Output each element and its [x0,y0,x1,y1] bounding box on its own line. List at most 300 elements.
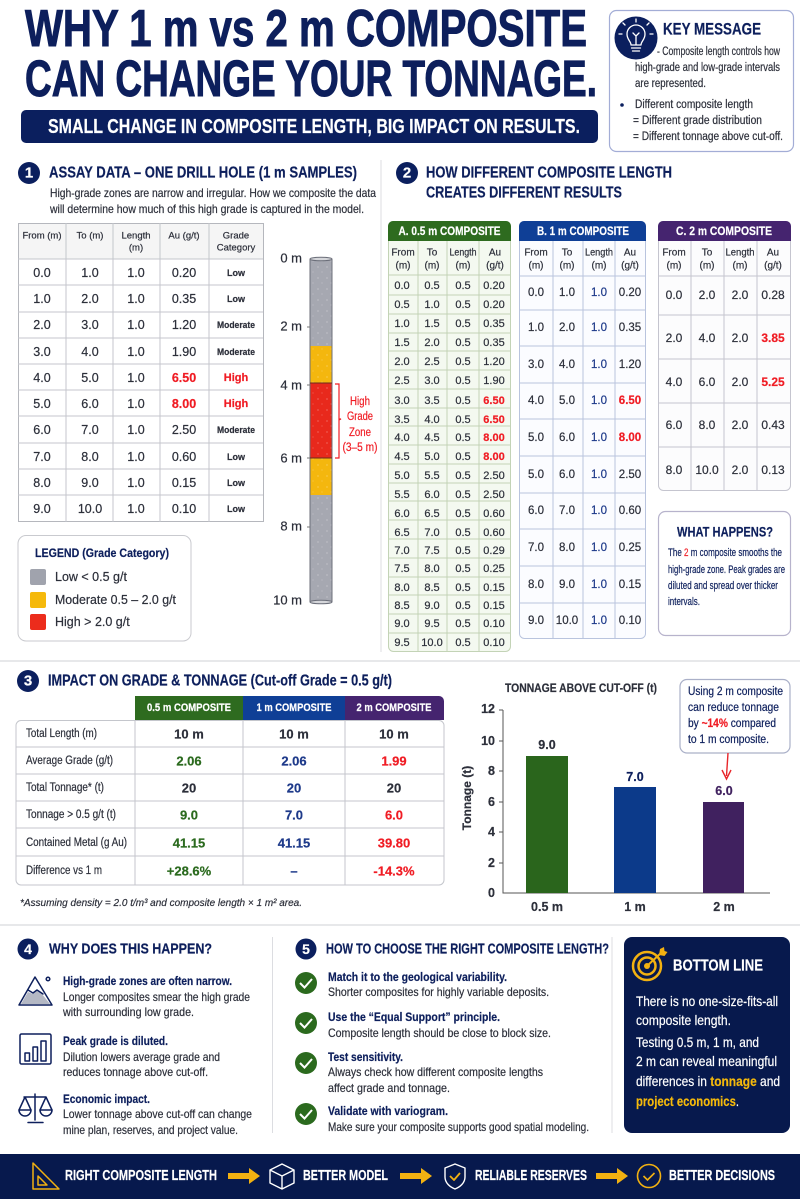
table A: 0.5 m composite: 4.5 [424,432,440,444]
tip: validate with variogram [328,1104,589,1134]
section 4 heading: WHY DOES THIS HAPPEN? [49,940,212,958]
table C: 2 m composite: 0.43 [761,418,785,432]
table C: 2 m composite: 4.0 [699,331,716,345]
table A: 0.5 m composite: 0.60 [483,527,505,539]
bar chart: tonnage above cut-off: 6 [488,795,495,809]
table A: 0.5 m composite: 0.5 [455,527,471,539]
assay data table: 7.0 [81,423,99,437]
section 1 intro text [49,186,376,216]
table C: 2 m composite: 2.0 [732,331,749,345]
table A: 0.5 m composite: 1.20 [483,356,505,368]
footer flow banner [0,1154,800,1199]
table A: 0.5 m composite: 1.0 [394,318,410,330]
table A: 0.5 m composite: 0.5 [455,451,471,463]
impact comparison table: 0.5 m COMPOSITE [147,702,231,714]
assay data table: Low [227,268,246,278]
bar chart: tonnage above cut-off: 10 [481,734,495,748]
bar chart: tonnage above cut-off: 8 [488,764,495,778]
callout: tonnage reduction [680,680,790,779]
table A: 0.5 m composite: 7.5 [424,545,440,557]
section 1 heading: ASSAY DATA – ONE DRILL HOLE (1 m SAMPLES) [49,164,357,182]
assay data table: 1.0 [81,266,99,280]
table C: 2 m composite: Au [767,248,779,258]
impact comparison table: Total Tonnage* (t) [26,782,104,794]
impact comparison table: 10 m [174,726,204,742]
table B: 1 m composite: To [562,248,573,258]
impact comparison table: Tonnage > 0.5 g/t (t) [26,809,116,821]
footnote: *Assuming density = 2.0 t/m³ and composite length × 1 m² area. [20,897,302,909]
table B: 1 m composite: 6.0 [559,432,575,444]
table B: 1 m composite: 0.60 [619,505,641,517]
table A: 0.5 m composite: 0.5 [455,356,471,368]
table A: 0.5 m composite: 0.5 [455,470,471,482]
table C: 2 m composite: 2.0 [732,375,749,389]
reason: economic impact: Lower tonnage above cut-off can change [63,1107,252,1121]
table A: 0.5 m composite: (m) [396,260,410,272]
table A: 0.5 m composite: 2.0 [394,356,410,368]
assay data table: Category [217,242,256,254]
bar chart: tonnage above cut-off [460,681,770,914]
table A: 0.5 m composite: 0.35 [483,337,505,349]
table A: 0.5 m composite: 1.0 [424,299,440,311]
table B: 1 m composite: From [524,248,548,258]
title [25,0,597,107]
bar chart: tonnage above cut-off: TONNAGE ABOVE CUT-OFF (t) [505,681,657,695]
footer flow banner: RELIABLE RESERVES [475,1168,587,1184]
section 2 heading: CREATES DIFFERENT RESULTS [426,184,622,202]
table B: 1 m composite: 0.25 [619,542,641,554]
drill core column: 0 m [280,250,302,266]
panel: bottom line: differences in tonnage and [636,1073,780,1089]
table B: 1 m composite: 8.0 [528,579,544,591]
assay data table: 8.00 [172,397,196,411]
assay data table: Moderate [217,320,255,330]
assay data table: 1.0 [127,476,145,490]
table B: 1 m composite: B. 1 m COMPOSITE [537,224,629,238]
table A: 0.5 m composite: 2.5 [394,375,410,387]
panel: key message: Different composite length [635,99,753,111]
table A: 0.5 m composite: 0.25 [483,563,505,575]
impact comparison table: – [290,864,298,878]
bar chart: tonnage above cut-off: Tonnage (t) [460,766,474,830]
section 1 intro text: High-grade zones are narrow and irregular. How we composite the data [50,186,376,200]
table B: 1 m composite: 1.20 [619,359,641,371]
reason: peak grade diluted: reduces tonnage above cut-off. [63,1065,208,1079]
assay data table: 0.0 [33,266,51,280]
table A: 0.5 m composite: 8.5 [394,600,410,612]
assay data table: 1.0 [127,292,145,306]
table C: 2 m composite: To [702,248,713,258]
table A: 0.5 m composite: 8.00 [483,451,505,463]
table A: 0.5 m composite: 6.50 [483,395,505,407]
icon: check 1 [295,972,317,994]
table B: 1 m composite: Au [624,248,636,258]
icon: check 3 [295,1052,317,1074]
table B: 1 m composite: (m) [528,260,544,272]
title: CAN CHANGE YOUR TONNAGE. [25,50,597,107]
assay data table: 0.20 [172,266,196,280]
assay data table: High [224,372,248,384]
table A: 0.5 m composite: 0.5 [455,432,471,444]
assay data table: 6.0 [81,397,99,411]
section 1 heading: 1 [25,164,33,182]
table B: 1 m composite: 0.10 [619,615,641,627]
table B: 1 m composite: 8.00 [619,432,641,444]
tip: equal support: Composite length should be close to block size. [328,1026,551,1040]
assay data table: 1.0 [127,266,145,280]
assay data table: 1.90 [172,345,196,359]
reason: narrow zones [62,974,250,1019]
panel: bottom line: project economics. [636,1093,739,1109]
table A: 0.5 m composite: 3.0 [394,395,410,407]
assay data table: 2.50 [172,423,196,437]
tip: validate with variogram: Validate with variogram. [328,1104,448,1118]
table C: 2 m composite: (m) [700,260,714,272]
tip: equal support: Use the “Equal Support” principle. [328,1010,500,1024]
panel: bottom line [624,937,790,1133]
table C: 2 m composite: (g/t) [764,260,782,272]
table A: 0.5 m composite: 0.10 [483,637,505,649]
table A: 0.5 m composite: 0.5 [455,280,471,292]
section 4 heading [18,938,212,960]
assay data table: 0.60 [172,450,196,464]
table A: 0.5 m composite: 10.0 [421,637,443,649]
table B: 1 m composite: 9.0 [559,579,575,591]
section 4 heading: 4 [24,941,32,957]
assay data table: Moderate [217,347,255,357]
table C: 2 m composite: 0.28 [761,288,785,302]
icon: light bulb [614,16,658,60]
reason: economic impact: mine plan, reserves, and project value. [63,1123,238,1137]
callout: high grade zone: Grade [347,411,373,423]
bar chart: tonnage above cut-off: 7.0 [626,770,644,784]
table A: 0.5 m composite: 0.5 [455,375,471,387]
bar chart: tonnage above cut-off: 0 [488,886,495,900]
table A: 0.5 m composite: 0.5 [455,545,471,557]
table A: 0.5 m composite: 5.5 [394,489,410,501]
panel: what happens: intervals. [668,596,700,608]
bar chart: tonnage above cut-off: 1 m [624,900,646,914]
reason: narrow zones: Longer composites smear the high grade [63,990,250,1004]
table B: 1 m composite: 6.50 [619,395,641,407]
panel: bottom line: There is no one-size-fits-all [636,993,778,1009]
table A: 0.5 m composite: 6.5 [394,527,410,539]
section 5 heading [296,938,609,960]
tip: geological variability: Match it to the geological variability. [328,970,507,984]
panel: bottom line: composite length. [636,1012,731,1028]
assay data table: 7.0 [33,450,51,464]
table C: 2 m composite: C. 2 m COMPOSITE [676,224,772,238]
table B: 1 m composite: 1.0 [591,505,607,517]
assay data table: Low [227,294,246,304]
assay data table: 4.0 [81,345,99,359]
callout: tonnage reduction: by ~14% compared [688,718,776,730]
table A: 0.5 m composite: 0.5 [455,337,471,349]
table A: 0.5 m composite: 4.5 [394,451,410,463]
table C: 2 m composite: 6.0 [699,375,716,389]
callout: high grade zone: Zone [349,427,371,439]
impact comparison table: 20 [182,780,196,796]
reason: peak grade diluted [63,1034,220,1079]
table B: 1 m composite: 0.15 [619,579,641,591]
table C: 2 m composite: 2.0 [732,463,749,477]
table A: 0.5 m composite: A. 0.5 m COMPOSITE [398,224,500,238]
table B: 1 m composite: 0.35 [619,322,641,334]
section 1 heading [18,162,357,184]
table B: 1 m composite: 6.0 [528,505,544,517]
table B: 1 m composite: 1.0 [591,469,607,481]
table B: 1 m composite: 1.0 [591,359,607,371]
table C: 2 m composite: 2.0 [732,288,749,302]
impact comparison table: Total Length (m) [26,728,97,740]
assay data table: 9.0 [33,502,51,516]
table C: 2 m composite: 8.0 [666,463,683,477]
table B: 1 m composite: 1.0 [591,287,607,299]
table B: 1 m composite: (m) [592,260,606,272]
subtitle banner [21,110,598,143]
table A: 0.5 m composite: 9.0 [424,600,440,612]
icon: set square [33,1163,59,1189]
table A: 0.5 m composite: 4.0 [424,414,440,426]
table A: 0.5 m composite: 0.5 [455,489,471,501]
impact comparison table: 20 [287,780,301,796]
reason: narrow zones: High-grade zones are often narrow. [63,974,232,988]
impact comparison table: 10 m [379,726,409,742]
section 2 heading: HOW DIFFERENT COMPOSITE LENGTH [426,164,672,182]
table A: 0.5 m composite: 2.50 [483,489,505,501]
bar chart: tonnage above cut-off: 2 m [713,900,735,914]
reason: economic impact [63,1092,252,1137]
icon: check 4 [295,1103,317,1125]
section 1 intro text: will determine how much of this high grade is captured in the model. [49,202,364,216]
table A: 0.5 m composite: 8.5 [424,582,440,594]
subtitle banner: SMALL CHANGE IN COMPOSITE LENGTH, BIG IMPACT ON RESULTS. [48,116,580,138]
impact comparison table: 1 m COMPOSITE [256,702,332,714]
table A: 0.5 m composite: Au [489,248,501,258]
table B: 1 m composite: 1.0 [591,542,607,554]
table A: 0.5 m composite: 0.35 [483,318,505,330]
table A: 0.5 m composite: From [391,248,415,258]
assay data table: 2.0 [33,318,51,332]
table A: 0.5 m composite: 6.50 [483,414,505,426]
table B: 1 m composite: 5.0 [528,469,544,481]
table A: 0.5 m composite: 2.5 [424,356,440,368]
table A: 0.5 m composite: 0.5 [455,618,471,630]
table B: 1 m composite: 7.0 [559,505,575,517]
legend: LEGEND (Grade Category) [35,546,169,560]
bar chart: tonnage above cut-off: 9.0 [538,738,556,752]
table A: 0.5 m composite: 3.5 [424,395,440,407]
impact comparison table [16,696,444,885]
bar chart: tonnage above cut-off: 0.5 m [531,900,563,914]
table B: 1 m composite: 8.0 [559,542,575,554]
tip: geological variability [328,970,549,999]
callout: high grade zone: (3–5 m) [342,442,378,454]
impact comparison table: 20 [387,780,401,796]
table A: 0.5 m composite: 0.5 [455,395,471,407]
drill core column: 10 m [273,592,302,608]
assay data table: 5.0 [33,397,51,411]
assay data table: Au (g/t) [168,230,200,242]
arrow: step 2 [400,1168,432,1184]
icon: shield [445,1164,465,1189]
assay data table: 10.0 [78,502,102,516]
icon: check 2 [295,1012,317,1034]
tip: test sensitivity: Test sensitivity. [328,1050,403,1064]
panel: what happens: WHAT HAPPENS? [677,524,773,540]
arrow: step 3 [596,1168,628,1184]
table C: 2 m composite: 10.0 [695,463,719,477]
table B: 1 m composite: 0.20 [619,287,641,299]
drill core column [273,250,332,608]
bar chart: tonnage above cut-off: 4 [488,825,495,839]
table B: 1 m composite: 4.0 [528,395,544,407]
panel: key message [610,10,794,152]
table C: 2 m composite: 2.0 [666,331,683,345]
bar chart: tonnage above cut-off: 12 [481,702,495,716]
table C: 2 m composite: From [662,248,686,258]
drill core column: 2 m [280,318,302,334]
drill core column: 4 m [280,378,302,392]
assay data table: 1.0 [127,397,145,411]
table A: 0.5 m composite: 7.0 [424,527,440,539]
assay data table: 5.0 [81,371,99,385]
footer flow banner: BETTER MODEL [303,1168,388,1184]
callout: tonnage reduction: to 1 m composite. [688,734,769,746]
table C: 2 m composite: 0.13 [761,463,785,477]
assay data table: Low [227,504,246,514]
table A: 0.5 m composite: 1.90 [483,375,505,387]
table A: 0.5 m composite: (m) [456,260,470,272]
table B: 1 m composite: 7.0 [528,542,544,554]
table B: 1 m composite: Length [585,248,613,258]
table A: 0.5 m composite: 6.5 [424,508,440,520]
table A: 0.5 m composite: 7.0 [394,545,410,557]
table B: 1 m composite: 5.0 [528,432,544,444]
table B: 1 m composite: (g/t) [621,260,639,272]
impact comparison table: Average Grade (g/t) [26,755,113,767]
table B: 1 m composite: 10.0 [556,615,578,627]
callout: tonnage reduction: can reduce tonnage [688,702,779,714]
assay data table: Low [227,478,246,488]
section 2 heading: 2 [403,164,411,182]
table C: 2 m composite: (m) [732,260,748,272]
callout: tonnage reduction: Using 2 m composite [688,686,783,698]
table B: 1 m composite: 6.0 [559,469,575,481]
callout: high grade zone [335,384,378,458]
assay data table: From (m) [22,230,62,242]
impact comparison table: 6.0 [385,808,403,822]
panel: bottom line: BOTTOM LINE [673,958,763,974]
panel: key message: = Different grade distribution [633,115,762,127]
panel: bottom line: Testing 0.5 m, 1 m, and [636,1034,759,1050]
table C: 2 m composite: Length [726,248,754,258]
table B: 1 m composite: 1.0 [591,615,607,627]
table B: 1 m composite [519,221,646,639]
table A: 0.5 m composite: 1.5 [394,337,410,349]
table A: 0.5 m composite: 0.0 [394,280,410,292]
table B: 1 m composite: 1.0 [591,322,607,334]
assay data table [18,223,264,522]
assay data table: 1.0 [127,423,145,437]
table B: 1 m composite: 1.0 [528,322,544,334]
assay data table: 0.10 [172,502,196,516]
table C: 2 m composite [658,221,791,491]
table A: 0.5 m composite: 5.0 [394,470,410,482]
table B: 1 m composite: (m) [560,260,574,272]
impact comparison table: 2.06 [176,754,202,768]
table B: 1 m composite: 1.0 [591,395,607,407]
table A: 0.5 m composite: 2.0 [424,337,440,349]
assay data table: Moderate [217,425,255,435]
assay data table: 1.20 [172,318,196,332]
assay data table: Low [227,452,246,462]
table A: 0.5 m composite: 9.5 [424,618,440,630]
table A: 0.5 m composite: 0.5 [455,414,471,426]
table B: 1 m composite: 3.0 [528,359,544,371]
table A: 0.5 m composite: (m) [424,260,440,272]
legend: Moderate 0.5 – 2.0 g/t [55,593,177,607]
table A: 0.5 m composite: 0.20 [483,299,505,311]
table A: 0.5 m composite: 0.60 [483,508,505,520]
table A: 0.5 m composite: 9.5 [394,637,410,649]
table B: 1 m composite: 5.0 [559,395,575,407]
section 3 heading: IMPACT ON GRADE & TONNAGE (Cut-off Grade = 0.5 g/t) [48,672,392,690]
table A: 0.5 m composite: 0.5 [394,299,410,311]
tip: equal support [328,1010,551,1040]
legend: Low < 0.5 g/t [55,570,127,584]
assay data table: 1.0 [127,345,145,359]
tip: test sensitivity: Always check how different composite lengths [328,1065,543,1079]
icon: mountain [19,977,52,1005]
assay data table: 4.0 [33,371,51,385]
icon: check circle [638,1164,660,1188]
impact comparison table: Difference vs 1 m [26,865,102,877]
arrow: step 1 [228,1168,260,1184]
table A: 0.5 m composite: 8.0 [394,582,410,594]
reason: peak grade diluted: Peak grade is diluted. [63,1034,168,1048]
table A: 0.5 m composite: 4.0 [394,432,410,444]
table C: 2 m composite: 2.0 [699,288,716,302]
icon: target [633,947,668,980]
assay data table: 3.0 [33,345,51,359]
table A: 0.5 m composite: 1.5 [424,318,440,330]
table A: 0.5 m composite: 7.5 [394,563,410,575]
assay data table: 2.0 [81,292,99,306]
panel: what happens [658,512,790,636]
impact comparison table: Contained Metal (g Au) [26,837,127,849]
table A: 0.5 m composite: 8.0 [424,563,440,575]
table C: 2 m composite: 4.0 [666,375,683,389]
title: WHY 1 m vs 2 m COMPOSITE [25,0,587,58]
assay data table: 3.0 [81,318,99,332]
table A: 0.5 m composite: 9.0 [394,618,410,630]
impact comparison table: 2 m COMPOSITE [356,702,432,714]
assay data table: (m) [129,242,143,254]
impact comparison table: 2.06 [281,754,307,768]
table A: 0.5 m composite: 6.0 [394,508,410,520]
table A: 0.5 m composite: 0.5 [455,563,471,575]
table C: 2 m composite: 3.85 [761,331,785,345]
legend [18,536,191,641]
footer flow banner: RIGHT COMPOSITE LENGTH [65,1168,217,1184]
legend: High > 2.0 g/t [55,615,130,629]
table C: 2 m composite: (m) [666,260,682,272]
table B: 1 m composite: 9.0 [528,615,544,627]
table A: 0.5 m composite: 0.5 [455,318,471,330]
table A: 0.5 m composite: 3.5 [394,414,410,426]
table A: 0.5 m composite: 0.5 [455,582,471,594]
